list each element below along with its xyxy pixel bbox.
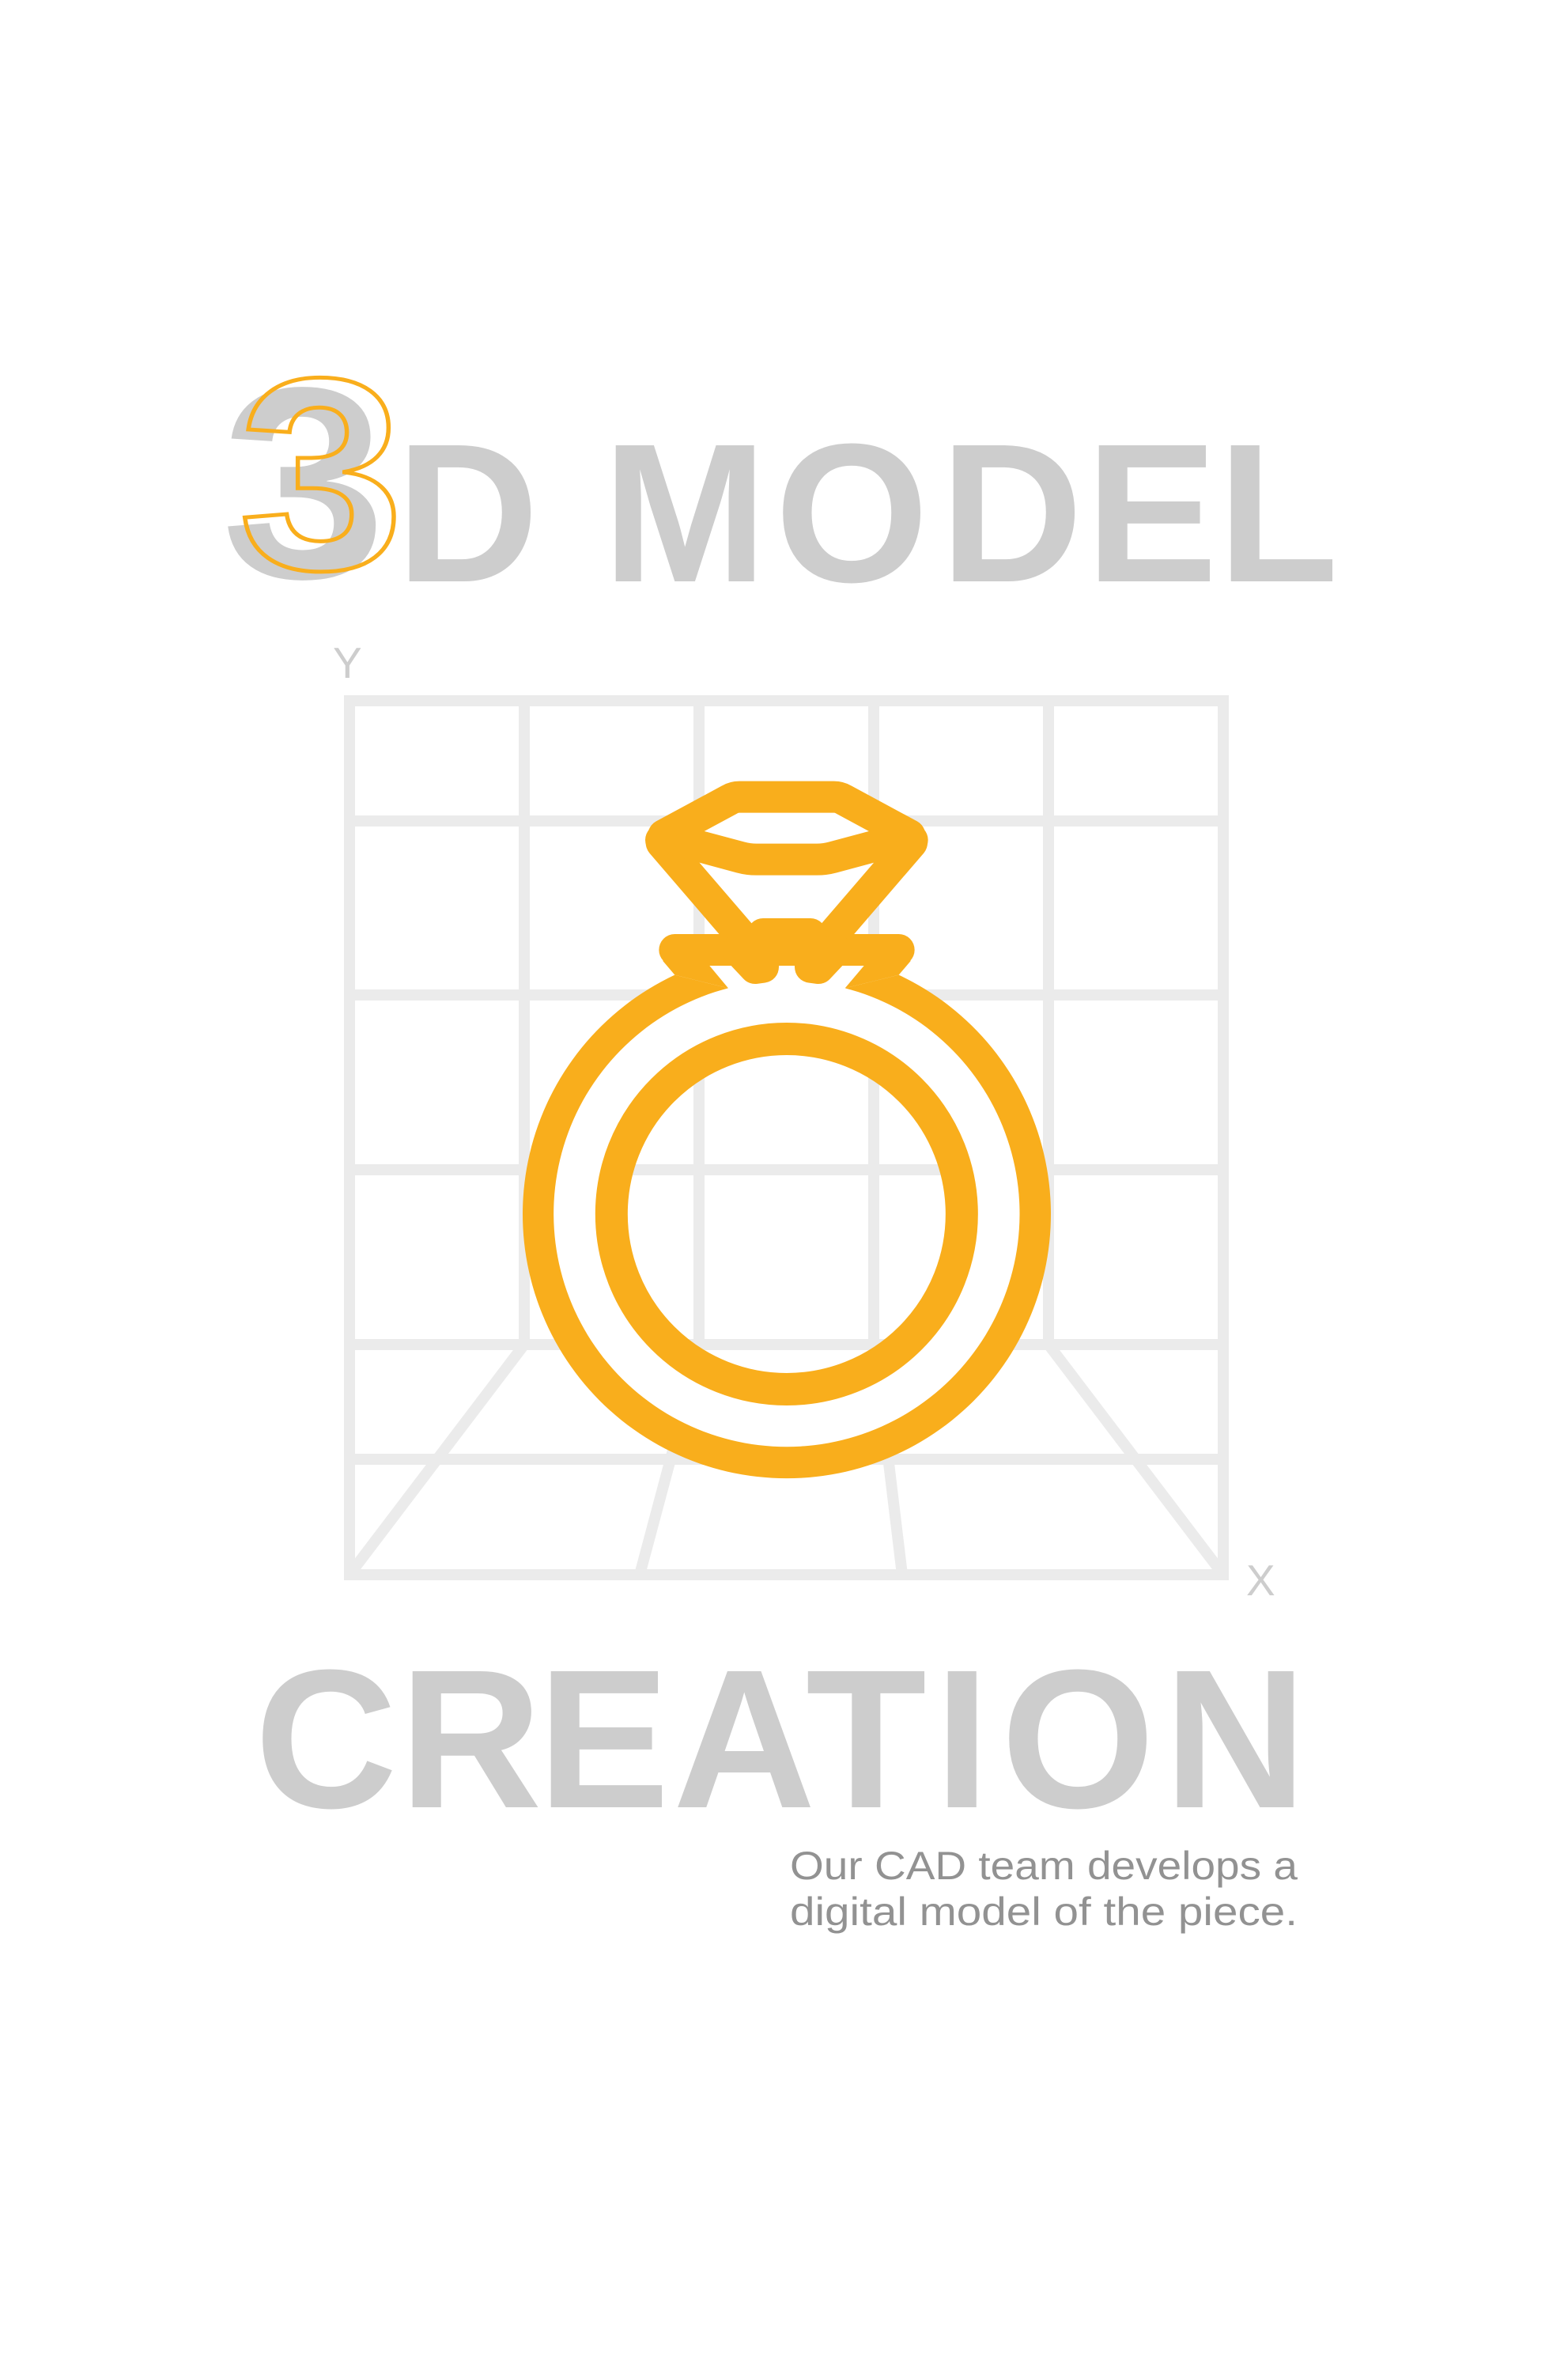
3D grid	[349, 701, 1223, 1575]
axis label X: X	[1246, 1556, 1275, 1605]
description text: Our CAD team develops a	[790, 1844, 1298, 1888]
numeral 3: grey with offset orange outline: 3	[221, 331, 387, 636]
description text	[790, 1844, 1298, 1934]
gem interior white mask	[662, 800, 911, 944]
inner ring band	[611, 1038, 962, 1389]
left ring shoulder	[663, 944, 728, 988]
description text: digital model of the piece.	[790, 1890, 1298, 1934]
numeral 3: grey with offset orange outline: 3	[238, 321, 405, 626]
outer ring band	[523, 975, 1051, 1478]
title: D MODEL: DMODEL	[396, 403, 1339, 623]
axis label Y: Y	[333, 638, 362, 687]
title: CREATION: CREATION	[255, 1629, 1307, 1849]
ring interior white mask	[550, 977, 1024, 1451]
icon: diamond ring	[523, 797, 1051, 1478]
gem and setting strokes	[661, 797, 912, 968]
right ring shoulder	[845, 944, 911, 988]
